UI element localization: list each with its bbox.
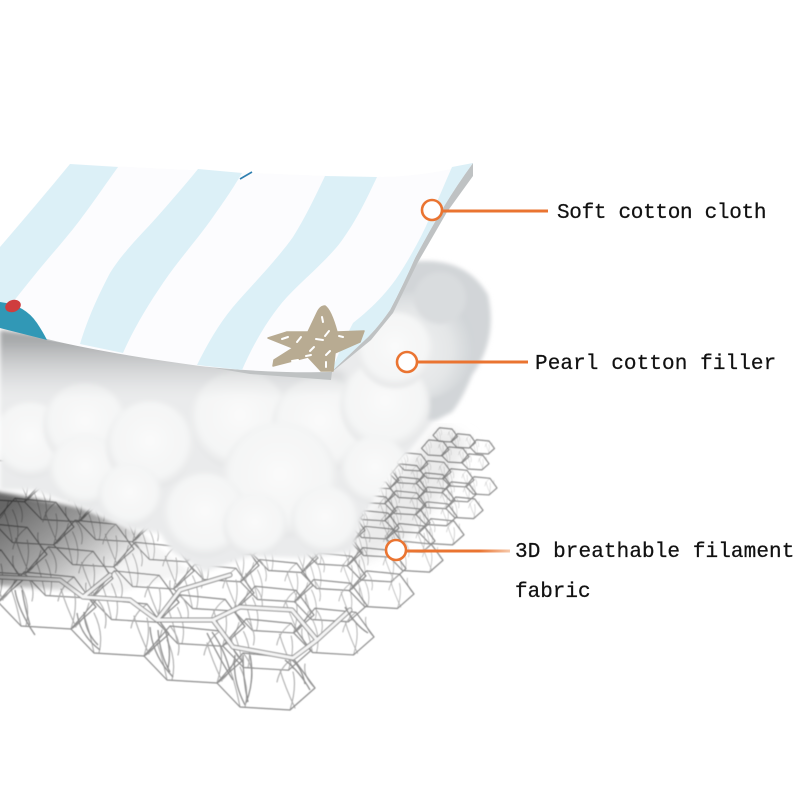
hexagonal mesh cells [0, 428, 497, 710]
callout: 3D breathable filament fabric: fabric [515, 581, 591, 604]
cloth surface [0, 163, 473, 372]
blue print detail [240, 172, 252, 179]
callout: pearl cotton filler [397, 352, 776, 376]
whale print [0, 302, 47, 340]
stripe 1 [0, 164, 118, 318]
stripe 2 [80, 169, 242, 353]
cotton body [0, 250, 505, 580]
panel: soft cotton cloth [0, 163, 473, 380]
soft shadow on right mesh [355, 425, 470, 565]
starfish print [268, 306, 364, 371]
grey rear cotton lobes [396, 260, 492, 421]
cloth edge thickness [0, 163, 473, 380]
callout: soft cotton cloth [422, 200, 766, 225]
vertical filaments [15, 590, 368, 705]
shadow cast by cloth [0, 328, 344, 386]
stripe 4 [331, 163, 473, 372]
red print detail [3, 298, 23, 314]
thick woven band [0, 575, 350, 658]
callout: 3D breathable filament fabric: 3D breathable filament [515, 541, 794, 564]
callout: pearl cotton filler: Pearl cotton filler [535, 353, 776, 376]
panel: pearl cotton filler [0, 250, 505, 580]
callout: soft cotton cloth: Soft cotton cloth [557, 202, 766, 225]
mesh shadow overlay [0, 490, 190, 592]
stripe 3 [197, 176, 377, 370]
mesh: 3D breathable filament fabric [0, 425, 497, 710]
cotton balls [0, 312, 433, 557]
callout: 3D breathable filament fabric [386, 540, 794, 604]
